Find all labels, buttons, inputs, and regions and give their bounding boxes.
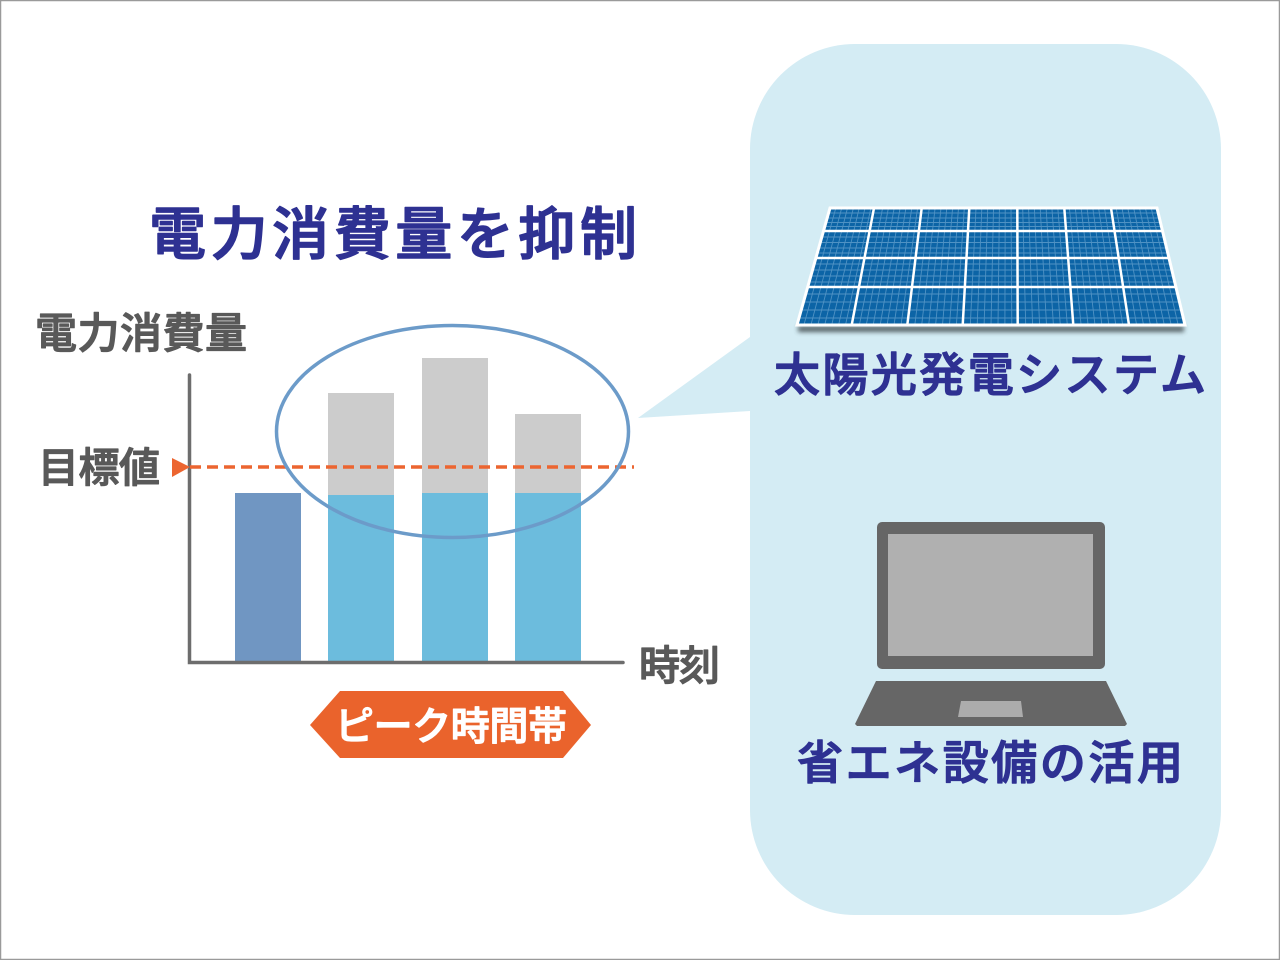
bar: peak 3 [515,414,581,661]
peak ellipse [276,326,628,538]
target dashed line [190,465,634,469]
chart axes [190,375,623,662]
icon: laptop [855,522,1127,726]
title: 電力消費量を抑制 [149,203,637,267]
bar: peak 2 [422,358,488,661]
x axis label: 時刻 [639,643,720,689]
target marker [172,458,190,477]
target value label: 目標値 [38,445,160,491]
bar: peak 1 [328,393,394,661]
solar power label: 太陽光発電システム [774,349,1206,401]
peak time badge: ピーク時間帯 [335,706,567,749]
y axis label: 電力消費量 [35,310,247,357]
icon: solar panel [790,207,1190,332]
bar chart [172,326,634,662]
bar: off-peak [235,493,301,661]
energy saving label: 省エネ設備の活用 [797,737,1183,789]
panel: countermeasures [638,44,1221,915]
peak time badge [310,691,591,758]
